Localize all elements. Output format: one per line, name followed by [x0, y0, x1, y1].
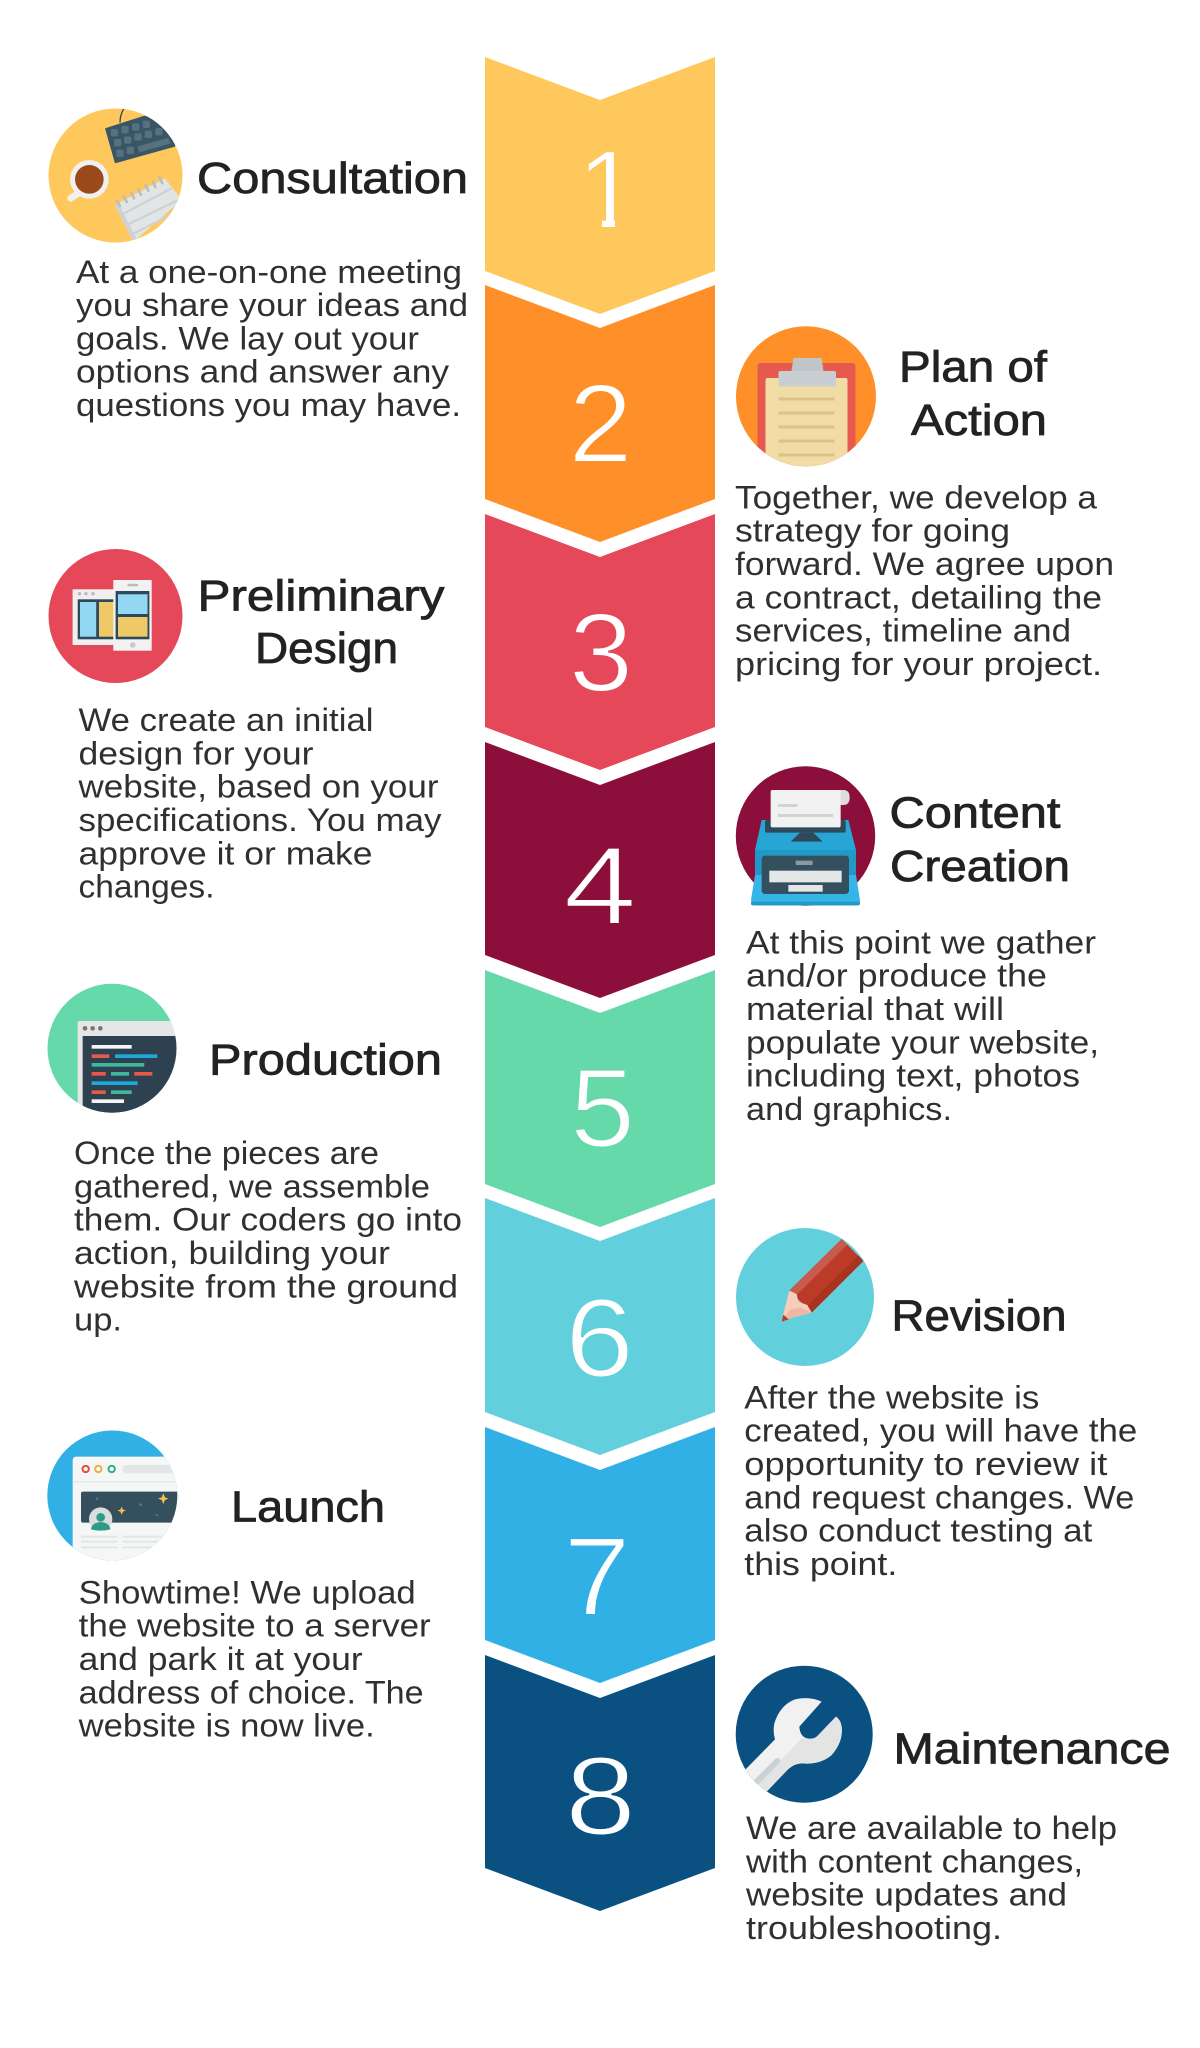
panel: content creation: [736, 766, 1099, 1127]
text block: launch: Showtime! We upload: [79, 1574, 416, 1610]
panel: plan of action: [735, 326, 1114, 682]
heading: Consultation: Consultation: [197, 154, 468, 203]
text block: revision: After the website is: [744, 1379, 1039, 1415]
text block: consultation: options and answer any: [76, 354, 449, 390]
text block: content creation: populate your website,: [746, 1024, 1099, 1060]
text block: production: gathered, we assemble: [74, 1168, 430, 1204]
heading: Production: Production: [209, 1035, 442, 1084]
text block: content creation: and graphics.: [746, 1091, 952, 1127]
heading: Preliminary Design: [198, 572, 444, 673]
text block: launch: website is now live.: [78, 1708, 375, 1744]
text block: maintenance: [745, 1810, 1117, 1946]
chevron 7: [485, 1427, 715, 1683]
text block: revision: and request changes. We: [744, 1479, 1134, 1515]
text block: maintenance: We are available to help: [746, 1810, 1117, 1846]
text block: launch: address of choice. The: [79, 1674, 424, 1710]
number 6: 6: [565, 1276, 634, 1400]
text block: plan of action: strategy for going: [735, 513, 1010, 549]
text block: maintenance: website updates and: [745, 1877, 1067, 1913]
text block: production: Once the pieces are: [74, 1135, 379, 1171]
chevron 1: [485, 57, 715, 314]
icon: pencil: [736, 1228, 874, 1366]
text block: revision: this point.: [744, 1546, 897, 1582]
icon: code editor window: [48, 984, 176, 1113]
panel: production: [48, 984, 462, 1338]
text block: preliminary design: design for your: [78, 735, 314, 771]
chevron 4: [485, 742, 715, 998]
text block: plan of action: services, timeline and: [735, 613, 1071, 649]
text block: production: up.: [74, 1302, 122, 1338]
text block: production: [73, 1135, 462, 1338]
panel: revision: [736, 1228, 1137, 1582]
heading: Content Creation: [890, 789, 1070, 891]
text block: preliminary design: approve it or make: [78, 835, 372, 871]
text block: content creation: [746, 924, 1099, 1127]
text block: production: action, building your: [74, 1235, 390, 1271]
text block: maintenance: troubleshooting.: [746, 1910, 1002, 1946]
text block: maintenance: with content changes,: [745, 1843, 1083, 1879]
panel: preliminary design: [48, 549, 444, 905]
text block: consultation: At a one-on-one meeting: [76, 254, 462, 290]
chevron 6: [485, 1198, 715, 1455]
heading: Plan of Action: Action: [911, 396, 1047, 445]
number 3: 3: [569, 591, 633, 715]
heading: Preliminary Design: Preliminary: [198, 572, 444, 621]
number 4: 4: [564, 824, 636, 948]
panel: consultation: [48, 108, 468, 423]
text block: plan of action: Together, we develop a: [735, 479, 1097, 515]
text block: launch: and park it at your: [79, 1641, 363, 1677]
chevron 3: [485, 514, 715, 770]
text block: revision: [744, 1379, 1137, 1582]
icon: typewriter: [736, 766, 875, 906]
text block: content creation: and/or produce the: [746, 958, 1047, 994]
heading: Maintenance: Maintenance: [894, 1724, 1170, 1773]
heading: Plan of Action: Plan of: [899, 343, 1048, 392]
chevron 5: [485, 970, 715, 1227]
text block: plan of action: forward. We agree upon: [735, 546, 1114, 582]
text block: revision: also conduct testing at: [744, 1513, 1092, 1549]
text block: preliminary design: changes.: [78, 869, 214, 905]
text block: consultation: questions you may have.: [76, 387, 461, 423]
text block: launch: the website to a server: [79, 1608, 431, 1644]
text block: content creation: At this point we gather: [746, 924, 1096, 960]
text block: preliminary design: [77, 702, 441, 905]
text block: launch: [78, 1574, 431, 1744]
icon: clipboard: [736, 326, 876, 473]
number 7: 7: [564, 1515, 630, 1639]
heading: Preliminary Design: Design: [255, 624, 398, 673]
text block: production: website from the ground: [73, 1268, 458, 1304]
panel: launch: [47, 1430, 431, 1744]
text block: content creation: including text, photos: [746, 1058, 1080, 1094]
heading: Revision: Revision: [892, 1292, 1066, 1341]
text block: revision: opportunity to review it: [744, 1446, 1107, 1482]
text block: preliminary design: website, based on your: [77, 769, 439, 805]
text block: preliminary design: We create an initial: [78, 702, 374, 738]
number 1: 1: [577, 128, 639, 252]
text block: content creation: material that will: [746, 991, 1004, 1027]
icon: website launch window: [47, 1430, 178, 1560]
text block: plan of action: [735, 479, 1114, 682]
icon: wrench: [736, 1666, 873, 1803]
heading: Content Creation: Creation: [890, 842, 1070, 891]
number 2: 2: [568, 362, 632, 486]
panel: maintenance: [736, 1666, 1170, 1946]
icon: desk with keyboard, cup and notepad: [48, 108, 183, 242]
heading: Launch: Launch: [231, 1483, 385, 1532]
text block: consultation: goals. We lay out your: [76, 320, 419, 356]
chevron 2: [485, 285, 715, 542]
text block: plan of action: pricing for your project.: [735, 646, 1102, 682]
icon: browser and phone wireframes: [48, 549, 182, 683]
text block: preliminary design: specifications. You may: [78, 802, 442, 838]
text block: plan of action: a contract, detailing the: [735, 579, 1102, 615]
text block: consultation: you share your ideas and: [76, 287, 468, 323]
text block: revision: created, you will have the: [744, 1413, 1137, 1449]
text block: production: them. Our coders go into: [74, 1202, 462, 1238]
text block: consultation: [76, 254, 468, 423]
heading: Plan of Action: [899, 343, 1048, 445]
number 5: 5: [570, 1046, 635, 1170]
number 8: 8: [565, 1734, 636, 1858]
heading: Content Creation: Content: [890, 789, 1060, 838]
chevron 8: [485, 1655, 715, 1911]
